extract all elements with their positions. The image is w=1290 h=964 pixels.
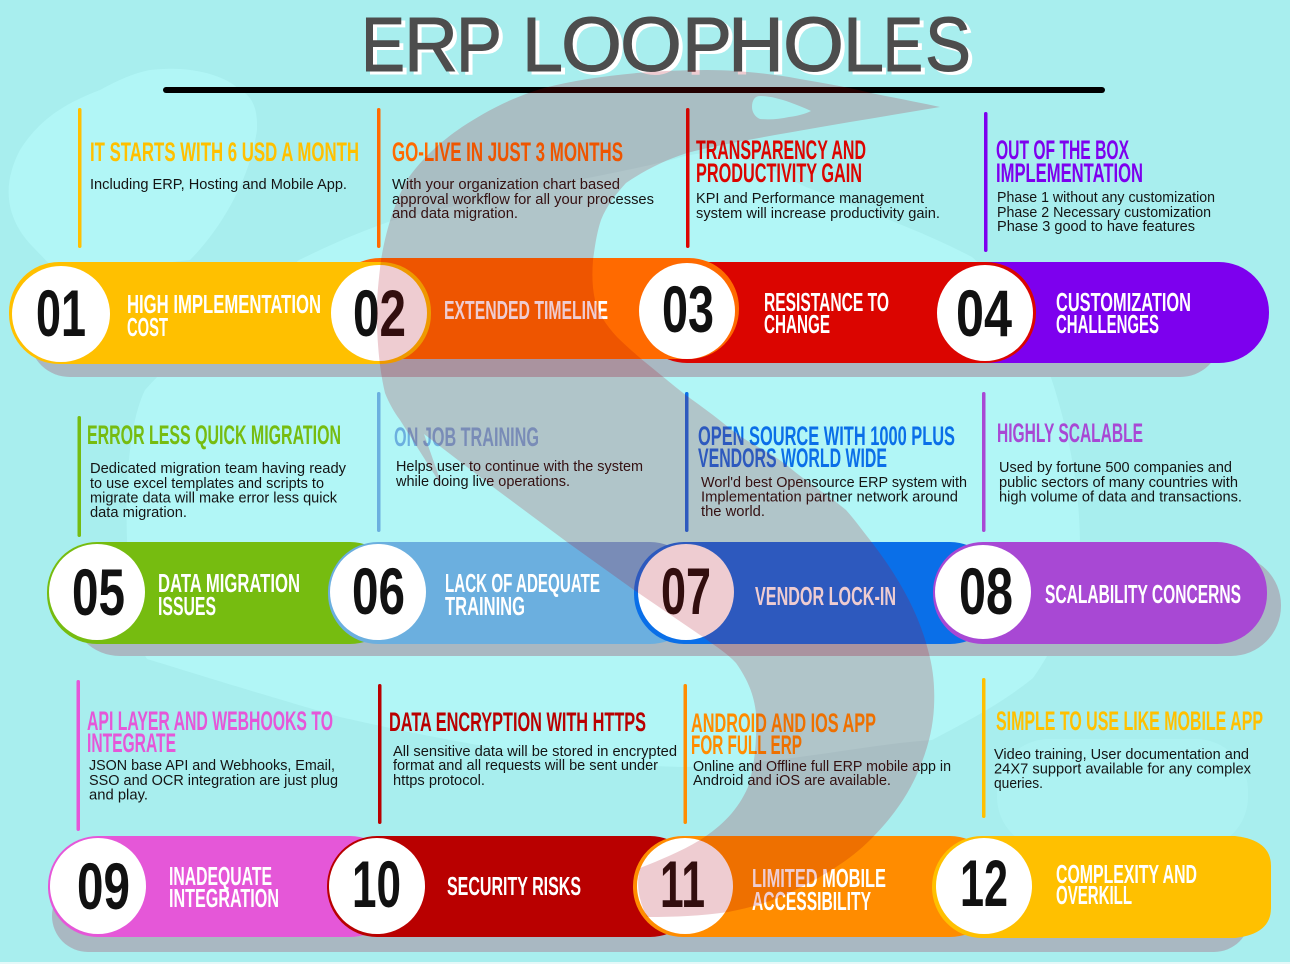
- label 01: HIGH IMPLEMENTATION: [127, 289, 321, 319]
- heading: GO-LIVE IN JUST 3 MONTHS: [392, 137, 623, 167]
- accent bar: [982, 678, 986, 818]
- heading: API LAYER AND WEBHOOKS TO: [87, 706, 333, 736]
- body: high volume of data and transactions.: [999, 490, 1242, 506]
- body: Implementation partner network around: [701, 490, 958, 506]
- body: and data migration.: [392, 206, 518, 222]
- background blob: lower right: [997, 739, 1248, 849]
- number badge 02: 02: [353, 276, 406, 350]
- label 12: [1056, 859, 1197, 910]
- body: and play.: [89, 788, 148, 804]
- body: Worl'd best Opensource ERP system with: [701, 475, 967, 491]
- label 04: CUSTOMIZATION: [1056, 287, 1191, 317]
- pill 04: [935, 262, 1269, 363]
- panel: simple to use: [982, 678, 1263, 818]
- label 11: LIMITED MOBILE: [752, 863, 886, 893]
- label 11: [752, 863, 886, 916]
- panel: api layer: [76, 680, 338, 831]
- heading: ANDROID AND IOS APP: [691, 708, 876, 738]
- translucent S watermark: [377, 70, 940, 917]
- panel: it starts with 6 usd: [78, 108, 359, 248]
- number badge 03: 03: [662, 272, 714, 346]
- body: Including ERP, Hosting and Mobile App.: [90, 177, 347, 193]
- ribbon shadow: [70, 555, 1281, 656]
- body: 24X7 support available for any complex: [994, 762, 1252, 778]
- panel: open source: [685, 392, 967, 532]
- accent bar: [685, 392, 688, 532]
- label 06: TRAINING: [445, 591, 525, 621]
- panel: android and ios app: [684, 684, 951, 824]
- body: Android and iOS are available.: [693, 773, 891, 789]
- title: E: [361, 2, 405, 88]
- accent bar: [378, 684, 382, 824]
- heading: [691, 708, 876, 760]
- number badge 02: [331, 265, 427, 361]
- body: [701, 475, 967, 520]
- heading: VENDORS WORLD WIDE: [698, 443, 887, 473]
- heading: [996, 135, 1143, 188]
- body: [693, 759, 951, 789]
- heading: [698, 421, 955, 473]
- panel: on job training: [377, 392, 643, 532]
- number badge 01: 01: [36, 276, 86, 350]
- ribbon shadow: [52, 880, 1250, 952]
- title: P: [682, 2, 732, 88]
- title: R: [404, 2, 458, 88]
- body: [696, 191, 940, 222]
- body: [90, 461, 347, 521]
- body: https protocol.: [393, 773, 485, 789]
- pill 09: [48, 836, 400, 937]
- label 03: [764, 287, 889, 339]
- pill 02: [330, 258, 739, 359]
- pill 08: [933, 542, 1267, 644]
- panel: transparency: [686, 108, 940, 248]
- number badge 04: 04: [956, 276, 1012, 350]
- body: [393, 744, 677, 789]
- accent bar: [377, 392, 380, 532]
- accent bar: [984, 112, 988, 252]
- label 12: COMPLEXITY AND: [1056, 859, 1197, 889]
- heading: IT STARTS WITH 6 USD A MONTH: [90, 137, 359, 167]
- number badge 05: [49, 544, 145, 640]
- pill 10: [327, 836, 700, 937]
- heading: IMPLEMENTATION: [996, 158, 1143, 188]
- ribbon row 1: [9, 258, 1269, 377]
- label 04: CHALLENGES: [1056, 309, 1159, 339]
- heading: [87, 706, 333, 758]
- number badge 01: [12, 266, 110, 362]
- body: system will increase productivity gain.: [696, 206, 940, 222]
- body: Phase 2 Necessary customization: [997, 205, 1211, 221]
- heading: PRODUCTIVITY GAIN: [696, 158, 862, 188]
- body: KPI and Performance management: [696, 191, 924, 207]
- body: format and all requests will be sent under: [393, 758, 658, 774]
- accent bar: [686, 108, 690, 248]
- pill 12: [932, 836, 1271, 938]
- title: O: [561, 2, 622, 88]
- number badge 06: 06: [352, 554, 405, 628]
- number badge 07: [638, 544, 734, 640]
- panel: error less migration: [78, 416, 347, 537]
- number badge 11: [637, 838, 733, 934]
- label 09: INTEGRATION: [169, 883, 279, 913]
- label 03: RESISTANCE TO: [764, 287, 889, 317]
- body: while doing live operations.: [395, 474, 570, 490]
- body: Video training, User documentation and: [994, 747, 1249, 763]
- label 12: OVERKILL: [1056, 880, 1132, 910]
- accent bar: [377, 108, 380, 248]
- body: Helps user to continue with the system: [396, 459, 643, 475]
- body: the world.: [701, 504, 765, 520]
- label 10: SECURITY RISKS: [447, 871, 581, 901]
- label 06: [445, 568, 600, 621]
- ribbon row 3: [48, 836, 1271, 952]
- number badge 07: 07: [661, 554, 711, 628]
- panel: go-live: [377, 108, 654, 248]
- label 02: EXTENDED TIMELINE: [444, 295, 608, 325]
- body: data migration.: [90, 505, 187, 521]
- number badge 11: 11: [660, 847, 705, 921]
- number badge 12: [936, 838, 1032, 934]
- title: S: [925, 2, 971, 88]
- number badge 08: [935, 545, 1031, 639]
- bottom edge: [0, 962, 1290, 964]
- background blob: upper left: [9, 69, 257, 275]
- heading: DATA ENCRYPTION WITH HTTPS: [389, 707, 646, 737]
- label 03: CHANGE: [764, 309, 830, 339]
- title: E: [883, 2, 923, 88]
- title: L: [843, 2, 884, 88]
- body: public sectors of many countries with: [999, 475, 1238, 491]
- pill 07: [634, 542, 1000, 644]
- body: Dedicated migration team having ready: [90, 461, 347, 477]
- number badge 12: 12: [960, 846, 1008, 920]
- body: With your organization chart based: [392, 177, 620, 193]
- label 06: LACK OF ADEQUATE: [445, 568, 600, 598]
- pill 11: [633, 836, 1000, 937]
- panel: highly scalable: [982, 392, 1242, 532]
- accent bar: [78, 108, 82, 248]
- heading: ON JOB TRAINING: [394, 422, 539, 452]
- number badge 04: [937, 265, 1033, 361]
- accent bar: [78, 416, 81, 537]
- heading: OUT OF THE BOX: [996, 135, 1129, 165]
- heading: FOR FULL ERP: [691, 730, 802, 760]
- label 05: DATA MIGRATION: [158, 568, 300, 598]
- body: SSO and OCR integration are just plug: [89, 773, 338, 789]
- label 09: [169, 861, 279, 913]
- number badge 10: [329, 838, 425, 934]
- label 01: [127, 289, 321, 342]
- heading: INTEGRATE: [87, 728, 176, 758]
- accent bar: [684, 684, 687, 824]
- pill 06: [328, 542, 700, 644]
- panel: out of the box: [984, 112, 1215, 252]
- title: P: [456, 2, 502, 88]
- title: O: [783, 2, 844, 88]
- number badge 03: [639, 263, 735, 359]
- number badge 09: [50, 838, 146, 934]
- title: H: [728, 2, 784, 88]
- background blob: large centre: [127, 153, 1080, 767]
- label 01: COST: [127, 312, 168, 342]
- body: queries.: [994, 776, 1043, 792]
- label 07: VENDOR LOCK-IN: [755, 581, 896, 611]
- heading: OPEN SOURCE WITH 1000 PLUS: [698, 421, 955, 451]
- body: [999, 460, 1242, 506]
- body: [89, 758, 338, 804]
- heading: ERROR LESS QUICK MIGRATION: [87, 420, 341, 450]
- ribbon shadow: [30, 300, 1220, 377]
- number badge 09: 09: [77, 849, 130, 923]
- label 05: ISSUES: [158, 591, 216, 621]
- body: [994, 747, 1252, 792]
- pill 05: [47, 542, 400, 644]
- accent bar: [76, 680, 80, 831]
- body: approval workflow for all your processes: [392, 192, 654, 208]
- body: [997, 190, 1215, 235]
- title: L: [522, 2, 563, 88]
- heading: TRANSPARENCY AND: [696, 135, 866, 165]
- number badge 08: 08: [959, 554, 1013, 628]
- label 04: [1056, 287, 1191, 339]
- pill 01: [9, 262, 431, 364]
- label 11: ACCESSIBILITY: [752, 886, 871, 916]
- body: [392, 177, 654, 222]
- body: [395, 459, 643, 490]
- label 05: [158, 568, 300, 621]
- body: Online and Offline full ERP mobile app in: [693, 759, 951, 775]
- number badge 06: [330, 544, 426, 640]
- number badge 10: 10: [352, 847, 401, 921]
- body: JSON base API and Webhooks, Email,: [89, 758, 335, 774]
- heading: [696, 135, 866, 188]
- panel: data encryption: [378, 684, 677, 824]
- body: to use excel templates and scripts to: [90, 476, 324, 492]
- number badge 05: 05: [72, 555, 125, 629]
- accent bar: [982, 392, 986, 532]
- body: All sensitive data will be stored in encrypted: [393, 744, 677, 760]
- title: O: [620, 2, 682, 88]
- body: Phase 3 good to have features: [997, 219, 1195, 235]
- body: Phase 1 without any customization: [997, 190, 1215, 206]
- body: migrate data will make error less quick: [90, 490, 338, 506]
- body: Used by fortune 500 companies and: [999, 460, 1232, 476]
- pill 03: [637, 262, 1036, 363]
- label 09: INADEQUATE: [169, 861, 272, 891]
- ribbon row 2: [47, 542, 1281, 656]
- title underline: [163, 87, 1105, 93]
- heading: HIGHLY SCALABLE: [997, 418, 1143, 448]
